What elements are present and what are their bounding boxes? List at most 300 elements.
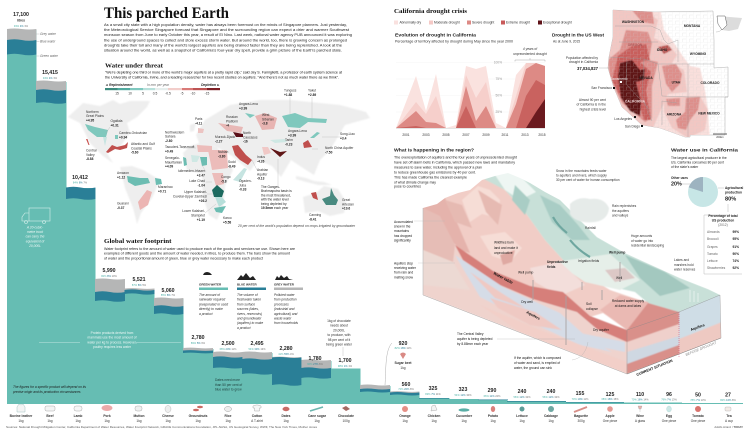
product: bovine leather (10, 404, 33, 423)
cutaway labels: water reserves (674, 268, 696, 272)
legend: replenishment and depletion: 5 (142, 92, 144, 96)
bar values: meat and crops: 87% 8% 5% (132, 283, 147, 287)
heading: what is happening: What is happening in the region? (394, 148, 474, 152)
aquifer labels: Asia and Australia: Angara-Lena (239, 102, 258, 106)
cutaway labels: Irrigation fields (578, 259, 600, 263)
aquifer labels: Asia and Australia: Artesian (342, 202, 354, 206)
cutaway labels: BEFORE DROUGHT (685, 341, 718, 357)
aquifer labels: Europe and Africa: Paris (195, 117, 202, 121)
bar values: sugar beet and lighter products: 560 (402, 382, 410, 388)
table: percentage of total US production: Lettuce (707, 259, 718, 263)
product: tomato: One piece (691, 419, 705, 423)
world map (68, 88, 370, 224)
crisis callout: of California is in the (577, 103, 606, 107)
region text: pose to countries (394, 185, 421, 189)
protein note with arrows: Protein products derived from (91, 331, 133, 335)
water use text: of the state's water (671, 165, 699, 169)
legend: replenishment and depletion: 0.5 (153, 92, 157, 96)
area chart: drought evolution: 2009 (482, 133, 490, 137)
panel: grey water: from production (274, 298, 297, 302)
intro text: monsoon season from June to early October this year, a result of El Nino. Last week, national water agency PUB announced it was exploring (104, 33, 352, 37)
cutaway labels: Dry well (521, 300, 533, 304)
panel: green water: directly) to make (199, 307, 223, 311)
aquifer labels: Americas: +0.71 (158, 190, 166, 194)
table: percentage of total US production: Tomato (707, 252, 718, 256)
crisis callout: highest crisis level (580, 107, 606, 111)
pie chart: water use: production (725, 191, 742, 195)
aquifer labels: Asia and Australia: -9.13 (257, 177, 265, 181)
cutaway labels: aquifer is being depleted (457, 337, 493, 341)
area chart: drought evolution: 2013 (521, 133, 529, 137)
bar values: meat and crops: 5,521 (133, 277, 146, 283)
aquifer labels: Americas: Guarani (117, 202, 129, 206)
aquifer labels: Asia and Australia: Song-Liao (340, 132, 355, 136)
cutaway labels: to aquifers and rivers, which supply (556, 174, 607, 178)
product: rice (224, 406, 232, 423)
panel: grey water: from households (274, 321, 298, 325)
product: chicken: Chicken (428, 414, 440, 418)
water use text: US, California consumes 80 per cent (671, 161, 724, 165)
product: cane sugar: Cane sugar (308, 414, 327, 418)
area chart: drought evolution: 2005 (442, 133, 450, 137)
aquifer labels: Europe and Africa: Sudd (228, 160, 236, 164)
product: lamb: Lamb (74, 414, 82, 418)
area chart: drought evolution: 2003 (422, 133, 430, 137)
region text (394, 155, 517, 189)
bar values: sugar beet and lighter products: 56% 12% 32% (542, 395, 560, 399)
cutaway labels: Aquifers stop (394, 261, 413, 265)
aquifer labels: Asia and Australia: Brahmaputra basin is (261, 189, 292, 193)
aquifer labels: Europe and Africa: Upper Kalahari- (184, 190, 207, 194)
aquifer labels: Asia and Australia: -16 (243, 140, 248, 144)
short cut face: current situation (627, 303, 679, 374)
product: baguette: Baguette (574, 414, 588, 418)
product: mutton: Mutton (134, 414, 144, 418)
extreme area (396, 80, 545, 128)
region text: measures to save water, including the approval of a plan (394, 166, 482, 170)
aquifer labels: Asia and Australia: West (262, 113, 269, 117)
heading: evolution of drought: Evolution of drought in California (395, 32, 476, 38)
product: tea: Tea (726, 414, 732, 418)
cutaway labels: and valleys (612, 214, 629, 218)
product: cane sugar: 1kg (314, 419, 320, 423)
area chart: drought evolution: 25% (495, 110, 502, 114)
product: pork: 1kg (104, 419, 110, 423)
state labels: UTAH (672, 80, 681, 84)
panel: blue water: freshwater taken (237, 298, 261, 302)
cutaway labels: Rain replenishes (612, 204, 636, 208)
region text: of what climate change may (394, 180, 436, 184)
truck caption: equivalent of (26, 239, 45, 243)
product: groundnuts: Groundnuts (189, 414, 208, 418)
bar values: sugar beet and lighter products: 82% 7% 11% (425, 392, 441, 396)
short cut face: before drought (678, 296, 720, 339)
abnormally dry area (396, 63, 545, 128)
footprint intro text (104, 247, 295, 260)
cutaway labels: If the aquifer, which is composed (514, 356, 561, 360)
long cut face (423, 245, 628, 362)
product: chocolate: 100g (342, 419, 350, 423)
aquifer labels: Americas: Great Plains (86, 114, 104, 118)
product: apple: Apple (605, 414, 615, 418)
bar values: sugar beet and lighter products: 325 (429, 386, 437, 392)
area chart: drought evolution: 100% (494, 60, 502, 64)
panel: green water: rainwater required (199, 298, 225, 302)
product: cheese: Cheese (162, 414, 174, 418)
panel: grey water: processes (273, 302, 289, 306)
product: dates (282, 407, 291, 423)
footprint intro text: examples of different goods and the amount of water needed, in litres, to produce them. The bars show the amount (104, 252, 290, 256)
scale bar: 200km (716, 136, 724, 139)
state borders (609, 26, 728, 137)
cutaway labels (394, 169, 718, 377)
aquifer labels: Asia and Australia: 19.5mm each year (261, 206, 288, 210)
heading: California drought crisis: California drought crisis (394, 8, 467, 15)
heading: water use in California: Water use in California (671, 148, 739, 152)
aquifer labels: Americas: Coastal Plains (131, 146, 152, 150)
water table band (455, 245, 627, 342)
aquifer labels: Americas: Ogallala (110, 119, 122, 123)
table: percentage of total US production: 91% (732, 245, 739, 249)
aquifer labels: Europe and Africa: Congo (221, 175, 231, 179)
aquifer labels: Europe and Africa: -2.27 (215, 140, 223, 144)
product: chocolate (338, 406, 354, 423)
bar values: meat and crops: 66% 27% 6% (307, 362, 323, 366)
legend: drought levels: Moderate drought (434, 20, 460, 24)
city markers: San Francisco (591, 86, 612, 90)
intro text: the use of underground spaces to collect and store excess storm water. But around the world, too, there is growing concern as prolonged (104, 38, 347, 42)
water type labels: Blue water (40, 40, 56, 44)
bar values: meat and crops: 68% 20% 11% (220, 347, 237, 351)
bar values: meat and crops: litres (17, 18, 25, 22)
continents (68, 100, 370, 224)
panel: green water (199, 272, 228, 316)
pie chart: water use: Agricultural (725, 186, 743, 190)
panel: blue water: BLUE WATER (237, 282, 257, 286)
aquifer labels: Europe and Africa: +5.58 (223, 220, 231, 224)
aquifer labels: Asia and Australia: The Ganges- (261, 185, 280, 189)
aquifer labels: Americas: +0.31 (110, 124, 119, 128)
legend: replenishment and depletion: -0.5 (165, 92, 171, 96)
product: lamb: 1kg (75, 419, 81, 423)
US West drought map (566, 8, 742, 140)
region text: This has made California the clearest example (394, 176, 467, 180)
icon: mountains and water (237, 273, 256, 280)
panel: blue water: rivers, reservoirs) (237, 312, 262, 316)
product: cotton: A T-shirt (251, 419, 263, 423)
aquifer labels: Americas: Northern (86, 110, 99, 114)
state labels: IDAHO (657, 48, 668, 52)
state labels: NEW MEXICO (698, 112, 720, 116)
aquifer labels: Asia and Australia: Caucasus (243, 135, 258, 139)
product: sugar beet (394, 352, 412, 370)
drought layers (605, 8, 730, 140)
aquifer labels: Europe and Africa: +1.19 (197, 218, 205, 222)
aquifer labels: Americas: +1.12 (117, 176, 125, 180)
aquifer labels: Americas: +4.95 (86, 118, 94, 122)
intro text (104, 23, 352, 53)
bar values: sugar beet and lighter products: 50 (695, 392, 701, 398)
region text: The overexploitation of aquifers and the four years of unprecedented drought (394, 155, 517, 159)
product: dates: Dates (282, 414, 291, 418)
product: beef (45, 406, 55, 423)
state labels: NEVADA (639, 76, 653, 80)
table: percentage of total US production: US production (712, 219, 734, 223)
aquifer labels: Europe and Africa: Taoudeni-Tanezrouft (165, 145, 194, 149)
panel: grey water: agricultural) and (274, 312, 297, 316)
callout: 4 years: 4 years of (523, 47, 538, 51)
dates note: Dates need more (215, 378, 240, 382)
area chart: drought evolution: 2007 (462, 133, 470, 137)
product: orange: Orange (399, 414, 411, 418)
product: tea: A cup (725, 419, 733, 423)
aquifer labels: Asia and Australia: Yakut (308, 88, 316, 92)
aquifer labels: Asia and Australia: Aquifer (257, 172, 268, 176)
bar values: meat and crops: 85% 8% 7% (161, 293, 176, 297)
product: groundnuts: 1kg (195, 419, 201, 423)
aquifer labels: Europe and Africa: +26.2 (199, 199, 207, 203)
legend: replenishment and depletion: Depletion ► (201, 83, 220, 87)
table: percentage of total US production (704, 214, 742, 274)
terrain: green wet side (482, 171, 722, 312)
aquifer labels: Asia and Australia: Tunguss (284, 88, 296, 92)
water type labels: Green water (40, 54, 59, 58)
cutaway labels: of water go into (631, 239, 653, 243)
panel: grey water: Polluted water (274, 293, 295, 297)
product: tomato: Tomato (692, 414, 704, 418)
product: cucumber: Cucumber (456, 414, 473, 418)
cutaway labels: unproductive (494, 251, 513, 255)
cutaway labels: Huge amounts (631, 234, 652, 238)
bar values: sugar beet and lighter products: 240 (518, 389, 526, 395)
aquifer labels: Americas: Cambro-Ordovician (119, 131, 147, 135)
cutaway labels: Accumulated (394, 220, 413, 224)
population callout: drought in California (569, 60, 598, 64)
state labels: WASHINGTON (622, 20, 645, 24)
protein note with arrows: water per kg to process. However, (87, 340, 137, 344)
panel: blue water: The volume of (237, 293, 258, 297)
product: orange (399, 406, 411, 423)
table: percentage of total US production: Strawberries (707, 266, 726, 270)
product: tea (725, 407, 733, 423)
rain lines at lake (690, 290, 698, 302)
product: wine: Wine (636, 414, 644, 418)
cutaway labels: Well pump (609, 250, 625, 254)
aquifer labels: Americas (86, 110, 173, 210)
panel: blue water: from surface (237, 302, 255, 306)
table: percentage of total US production: Almonds (707, 230, 720, 234)
panel: grey water (273, 275, 303, 325)
region text: have set off alarm bells in California, which passed new laws and mandatory (394, 160, 515, 164)
bar values: meat and crops: 82% 8% 10% (101, 274, 117, 278)
state labels: WYOMING (690, 52, 707, 56)
panel: blue water: and groundwater (237, 316, 262, 320)
product: lettuce (516, 406, 528, 423)
aquifer labels: Europe and Africa: +3.47 (197, 174, 205, 178)
product: lamb (74, 406, 82, 423)
product: pork: Pork (103, 414, 111, 418)
bar values: sugar beet and lighter products: 125 (606, 392, 614, 398)
cutaway labels: snow in the (394, 225, 411, 229)
aquifer labels: Europe and Africa: Sahara (165, 135, 176, 139)
exceptional drought layer (618, 60, 645, 116)
aquifer labels: Europe and Africa: -4.11 (195, 122, 202, 126)
legend: drought levels: Abnormally dry (400, 20, 422, 24)
aquifer labels: Asia and Australia: North (243, 131, 251, 135)
product: cheese: 1kg (165, 419, 171, 423)
cutaway labels: has dropped (394, 234, 412, 238)
pie chart: water use: 20% (671, 182, 682, 188)
aquifer labels: Americas: -5.60 (131, 151, 139, 155)
aquifer labels: Asia and Australia: +3.99 (288, 134, 296, 138)
product: apple (603, 406, 617, 423)
aquifer labels: Europe and Africa: Murzuk-Djado (215, 135, 235, 139)
abnormally dry layer (652, 12, 710, 137)
cutaway labels: Aquifers (690, 323, 705, 332)
aquifer labels: Asia and Australia: the most threatened, (261, 193, 291, 197)
quote: the University of California, Irvine, and a leading researcher for two recent studies on aquifers. "And there's not as much water there as we think". (105, 75, 339, 79)
product: egg (662, 406, 676, 423)
table: percentage of total US production: 92% (732, 266, 739, 270)
bar values: meat and crops: 84% 8% 7% (73, 180, 88, 184)
pie chart: water use: 80% (725, 196, 736, 202)
aquifer labels: Europe and Africa (165, 117, 252, 224)
aquifer labels: Asia and Australia: -4 (226, 124, 229, 128)
city markers: San Diego (625, 124, 640, 128)
aquifer labels: Europe and Africa: Senegalo- (165, 156, 180, 160)
legend: replenishment and depletion: -15 (205, 92, 210, 96)
exceptional area (526, 99, 545, 128)
region text: to reduce greenhouse gas emissions by 40 per cent. (394, 171, 476, 175)
aquifer labels: Americas: Maranhao (158, 185, 173, 189)
aquifer labels: Europe and Africa: Mauritanian (165, 160, 182, 164)
credit: Adolfo Arranz / TODAY (714, 425, 743, 429)
aquifer labels: Asia and Australia: North China Aquifer (325, 146, 353, 150)
aquifer labels: Asia and Australia: -8.41 (309, 218, 317, 222)
figures note: The figures for a specific product will depend on its (13, 385, 86, 389)
aquifer labels: Asia and Australia (226, 88, 355, 222)
aquifer labels: Asia and Australia: -0.23 (285, 142, 293, 146)
aquifer labels: Asia and Australia: Great (342, 198, 350, 202)
bar values: meat and crops: 2,780 (192, 335, 205, 341)
cloud (570, 198, 609, 222)
cutaway labels: residential landscaping (631, 244, 664, 248)
cutaway labels: Lakes and (674, 258, 689, 262)
aquifer labels: Americas: Valley (86, 153, 95, 157)
cutaway labels: Soil (586, 302, 591, 306)
heading: global water footprint: Global water footprint (104, 238, 172, 245)
city markers (591, 77, 643, 128)
callout: 4 years (513, 47, 547, 62)
bar values: meat and crops (13, 12, 353, 368)
intro text: the Meteorological Service Singapore forecast that Singapore and the surrounding region can expect a drier and warmer Southwest (104, 28, 349, 32)
bar values: meat and crops: 10,412 (72, 175, 88, 181)
bar values: sugar beet and lighter products: 96 (666, 392, 672, 398)
aquifer labels: Europe and Africa: -0.33 (239, 188, 247, 192)
intro text: As a small city state with a high population density, water has always been foremost on the minds of Singapore planners. Just yesterday, (104, 23, 347, 27)
product: sugar beet: 1kg (400, 366, 406, 370)
product: cucumber: 1kg (461, 419, 467, 423)
product: lettuce: 1kg (519, 419, 525, 423)
legend: drought levels: Severe drought (472, 20, 494, 24)
legend: replenishment and depletion: ◄ Replenishment (105, 83, 133, 87)
cutaway labels: receiving water (394, 266, 417, 270)
water type labels: Grey water (40, 32, 57, 36)
map note: 20 per cent of the world's population depend on crops irrigated by groundwater (237, 224, 356, 228)
product: cotton: Cotton (252, 414, 262, 418)
aquifer labels: Europe and Africa: Iullemeden-Irhazer (178, 169, 205, 173)
product: cabbage: 1kg (548, 419, 554, 423)
bar values: sugar beet and lighter products: 82% 18% 11% (395, 346, 412, 350)
chocolate note: needs about (330, 324, 348, 328)
cutaway labels: land and make it (494, 246, 518, 250)
product: chicken: 1kg (431, 419, 437, 423)
bar values: sugar beet and lighter products: 290 (488, 388, 496, 394)
aquifer labels: Europe and Africa: Nubian (218, 150, 228, 154)
aquifer labels: Europe and Africa: -5.8 (221, 180, 227, 184)
panel: green water: The amount of (199, 293, 220, 297)
icon: rain cloud (203, 272, 212, 275)
population callout (566, 56, 609, 71)
product: cucumber (456, 408, 473, 423)
legend: drought levels (394, 20, 572, 24)
inset US map (716, 16, 742, 32)
bar values: sugar beet and lighter products: 920 (399, 341, 407, 347)
aquifer labels: Asia and Australia: +3.99 (239, 106, 247, 110)
panel: grey water: GREY WATER (274, 282, 295, 286)
panel: blue water: sources (lakes, (237, 307, 259, 311)
water type labels (36, 32, 59, 58)
footprint intro text: of water and the proportional amount of green, blue or grey water necessary to make each product (104, 256, 263, 260)
legend: replenishment and depletion: In mm per year (147, 83, 170, 87)
product: wine (635, 406, 646, 423)
extreme drought layer (612, 44, 651, 120)
aquifer labels: Europe and Africa: Karoo (223, 216, 232, 220)
product: tomato (691, 406, 705, 423)
state labels: MONTANA (684, 24, 701, 28)
cutaway labels: Unproductive (547, 260, 568, 264)
scale bar (713, 134, 727, 139)
bar values: sugar beet and lighter products: 68% 16% 15% (601, 397, 619, 401)
area chart: drought evolution: 2011 (502, 133, 509, 137)
product: bovine leather: Bovine leather (10, 414, 33, 418)
aquifer labels: Europe and Africa: +4.09 (165, 165, 173, 169)
product: pork (102, 405, 112, 423)
aquifer labels: Asia and Australia: Siberian (262, 117, 274, 121)
panel: blue water: (aquifers) to make (237, 321, 263, 325)
evolution subtitle: Percentage of territory affected by drought during May since the year 2000 (395, 40, 513, 44)
panel: blue water: a product (237, 326, 252, 330)
table: percentage of total US production: 99% (732, 230, 739, 234)
panel: blue water (237, 273, 266, 330)
aquifer labels: Americas: Central (86, 148, 96, 152)
base states (608, 10, 728, 137)
table: percentage of total US production: 90% (732, 252, 739, 256)
legend: replenishment and depletion: -5 (181, 92, 184, 96)
state labels: COLORADO (701, 81, 720, 85)
aquifer labels: Asia and Australia: Arabian (257, 168, 268, 172)
area chart: drought evolution: 50% (495, 94, 502, 98)
protein note with arrows: mammals use the most amount of (88, 336, 137, 340)
product: egg: Egg (666, 414, 672, 418)
bar values: sugar beet and lighter products: 66% 11% 22% (484, 394, 501, 398)
product: baguette: 300g (577, 419, 585, 423)
product: cane sugar (308, 407, 327, 423)
aquifer labels: Asia and Australia: +3.4 (340, 136, 347, 140)
table: percentage of total US production: Grapes (707, 245, 718, 249)
aquifer labels: Americas: -8.88 (86, 157, 94, 161)
bar values: sugar beet and lighter products: 82% 10% 8% (720, 398, 736, 402)
